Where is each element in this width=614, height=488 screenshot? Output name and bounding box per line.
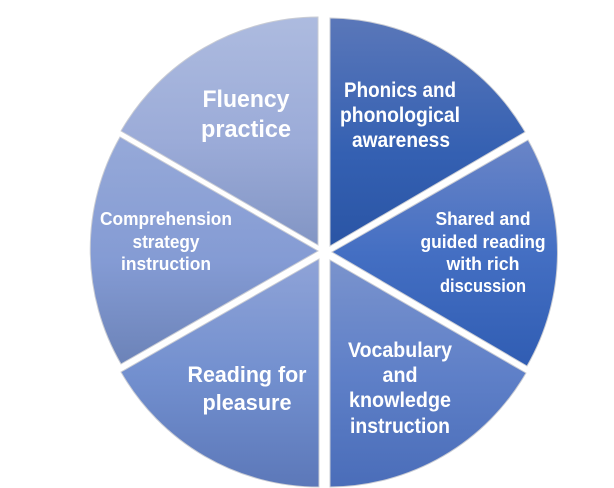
segment: fluency practice [121, 17, 318, 245]
segment: shared and guided reading with rich discussion: discussion [440, 275, 526, 296]
segment: vocabulary and knowledge instruction: knowledge [349, 389, 451, 412]
segment: reading for pleasure: Reading for [188, 362, 307, 387]
segment: comprehension strategy instruction: strategy [132, 232, 200, 252]
segment: phonics and phonological awareness [330, 18, 525, 246]
segment: fluency practice: Fluency [202, 86, 290, 113]
segment: shared and guided reading with rich discussion: with rich [446, 253, 520, 274]
segment: phonics and phonological awareness: Phonics and [344, 79, 456, 102]
segment: vocabulary and knowledge instruction: instruction [350, 415, 450, 438]
segment: comprehension strategy instruction: instruction [121, 254, 211, 274]
segment: fluency practice: practice [201, 116, 291, 143]
segment: shared and guided reading with rich discussion: guided reading [420, 231, 546, 252]
segment: comprehension strategy instruction: Comprehension [100, 209, 232, 229]
segment: phonics and phonological awareness: awareness [352, 129, 450, 152]
segment: phonics and phonological awareness: phonological [340, 104, 460, 127]
segment: shared and guided reading with rich discussion [332, 140, 557, 366]
segment: vocabulary and knowledge instruction [330, 260, 526, 487]
segment: reading for pleasure: pleasure [202, 390, 292, 415]
segment: comprehension strategy instruction [90, 137, 318, 364]
segment: vocabulary and knowledge instruction: Vocabulary [348, 339, 452, 362]
segment: shared and guided reading with rich discussion: Shared and [436, 208, 530, 229]
segment: vocabulary and knowledge instruction: and [382, 364, 418, 387]
segment: reading for pleasure [121, 259, 319, 487]
